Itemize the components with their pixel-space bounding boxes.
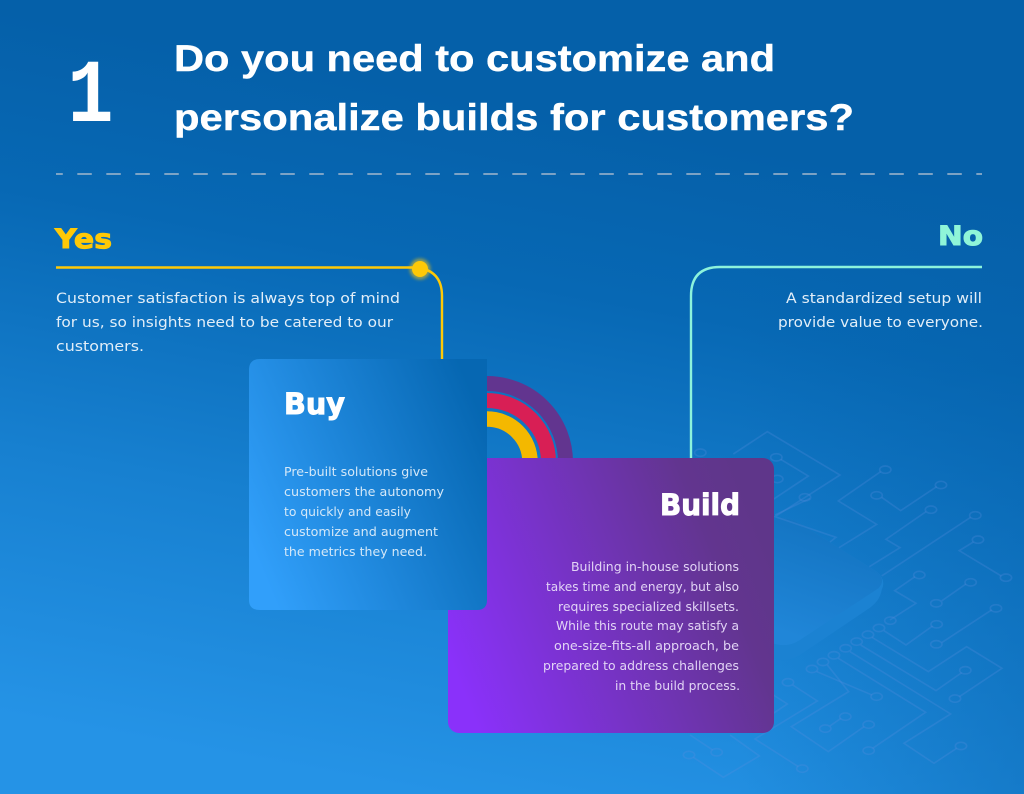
build description: in the build process.	[615, 679, 740, 693]
no description: provide value to everyone.	[778, 314, 983, 331]
yes description: Customer satisfaction is always top of mind	[56, 290, 400, 307]
build heading: Build	[660, 488, 740, 522]
yes description: for us, so insights need to be catered to our	[56, 314, 393, 331]
yes marker dot	[410, 258, 430, 280]
yes label: Yes	[54, 224, 112, 255]
build description	[543, 560, 740, 693]
buy description: customers the autonomy	[284, 485, 444, 499]
panel: buy	[249, 359, 487, 610]
buy description: to quickly and easily	[284, 505, 411, 519]
title: Do you need to customize and	[174, 38, 775, 79]
yes description: customers.	[56, 338, 144, 355]
yes description	[56, 290, 400, 355]
yes connector line	[56, 268, 442, 360]
step number: 1	[68, 47, 114, 149]
build description: Building in-house solutions	[571, 560, 739, 574]
build description: takes time and energy, but also	[546, 580, 739, 594]
no connector line	[691, 267, 982, 460]
no description: A standardized setup will	[786, 290, 982, 307]
build description: one-size-fits-all approach, be	[554, 639, 739, 653]
no description	[778, 290, 983, 331]
rainbow arcs	[487, 384, 566, 462]
buy description: customize and augment	[284, 525, 438, 539]
circuit board illustration	[683, 432, 1012, 777]
title: personalize builds for customers?	[174, 97, 854, 138]
buy heading: Buy	[284, 387, 345, 421]
buy description	[284, 465, 444, 559]
buy description: the metrics they need.	[284, 545, 427, 559]
title	[174, 38, 854, 138]
buy description: Pre-built solutions give	[284, 465, 428, 479]
build description: requires specialized skillsets.	[558, 600, 739, 614]
panel: build	[448, 458, 774, 733]
build description: prepared to address challenges	[543, 659, 739, 673]
build description: While this route may satisfy a	[556, 619, 739, 633]
no label: No	[938, 221, 983, 252]
